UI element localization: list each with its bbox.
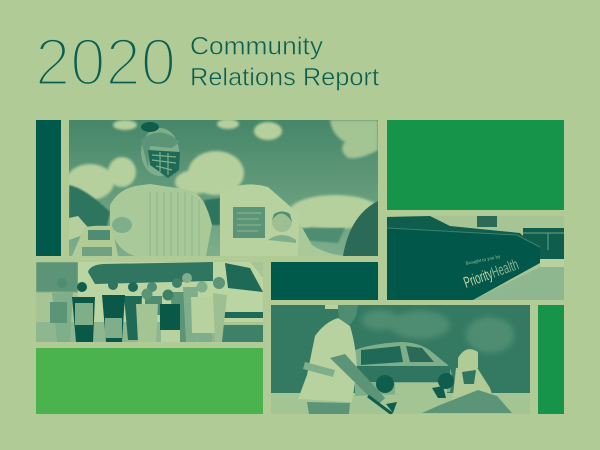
panel: dark green bar top left — [36, 120, 61, 256]
sponsor logo: PriorityHealth — [462, 256, 521, 292]
background wall — [523, 228, 564, 260]
panel: light green block bottom left — [36, 348, 263, 414]
kid 7 — [162, 290, 174, 300]
ground — [473, 267, 564, 300]
upper right cloud — [330, 120, 378, 158]
report name — [190, 32, 379, 92]
title — [35, 25, 379, 100]
ground — [36, 322, 220, 342]
report name: Community — [190, 32, 324, 60]
photo: Priority Health dumpster — [387, 216, 564, 300]
sign board — [477, 216, 497, 227]
head and mask — [141, 128, 179, 176]
report name: Relations Report — [190, 64, 379, 92]
photo: woman in mask holding sign — [69, 120, 378, 256]
distant house — [69, 216, 92, 240]
clouds — [66, 119, 381, 230]
hand — [298, 222, 345, 256]
girl in white — [196, 282, 208, 292]
seated volunteer — [458, 349, 478, 370]
dumpster body — [387, 228, 540, 300]
man's arm — [330, 354, 385, 405]
photo: volunteers with grabbers and car — [271, 305, 530, 414]
year: 2020 — [35, 25, 176, 100]
light kerb — [540, 259, 564, 267]
kid 5 — [142, 288, 152, 300]
kid 3 — [108, 280, 118, 290]
grabber tool — [368, 396, 392, 414]
panel: green bar bottom right — [538, 305, 564, 414]
tattoo — [112, 217, 132, 233]
grass — [271, 393, 530, 414]
car — [355, 342, 452, 396]
sponsor logo: Brought to you by — [465, 254, 501, 266]
woman body — [110, 184, 212, 256]
dark mound — [343, 201, 378, 256]
rim clutter — [387, 216, 525, 238]
parked car — [72, 226, 118, 256]
van body — [78, 262, 263, 322]
group of children — [50, 273, 227, 342]
man in vest — [337, 305, 358, 325]
trees behind — [69, 185, 110, 236]
kid 2 — [77, 282, 87, 292]
kid 1 — [57, 278, 67, 288]
panel: dark green block centre — [271, 262, 378, 300]
trees and car behind — [36, 262, 78, 292]
mottled trees — [362, 310, 514, 353]
back row — [128, 282, 138, 292]
photo: children in front of van — [36, 262, 263, 342]
woman at right — [213, 277, 225, 289]
shorts — [307, 402, 350, 414]
sign with baby — [220, 184, 300, 256]
panel: green block top right — [387, 120, 564, 210]
